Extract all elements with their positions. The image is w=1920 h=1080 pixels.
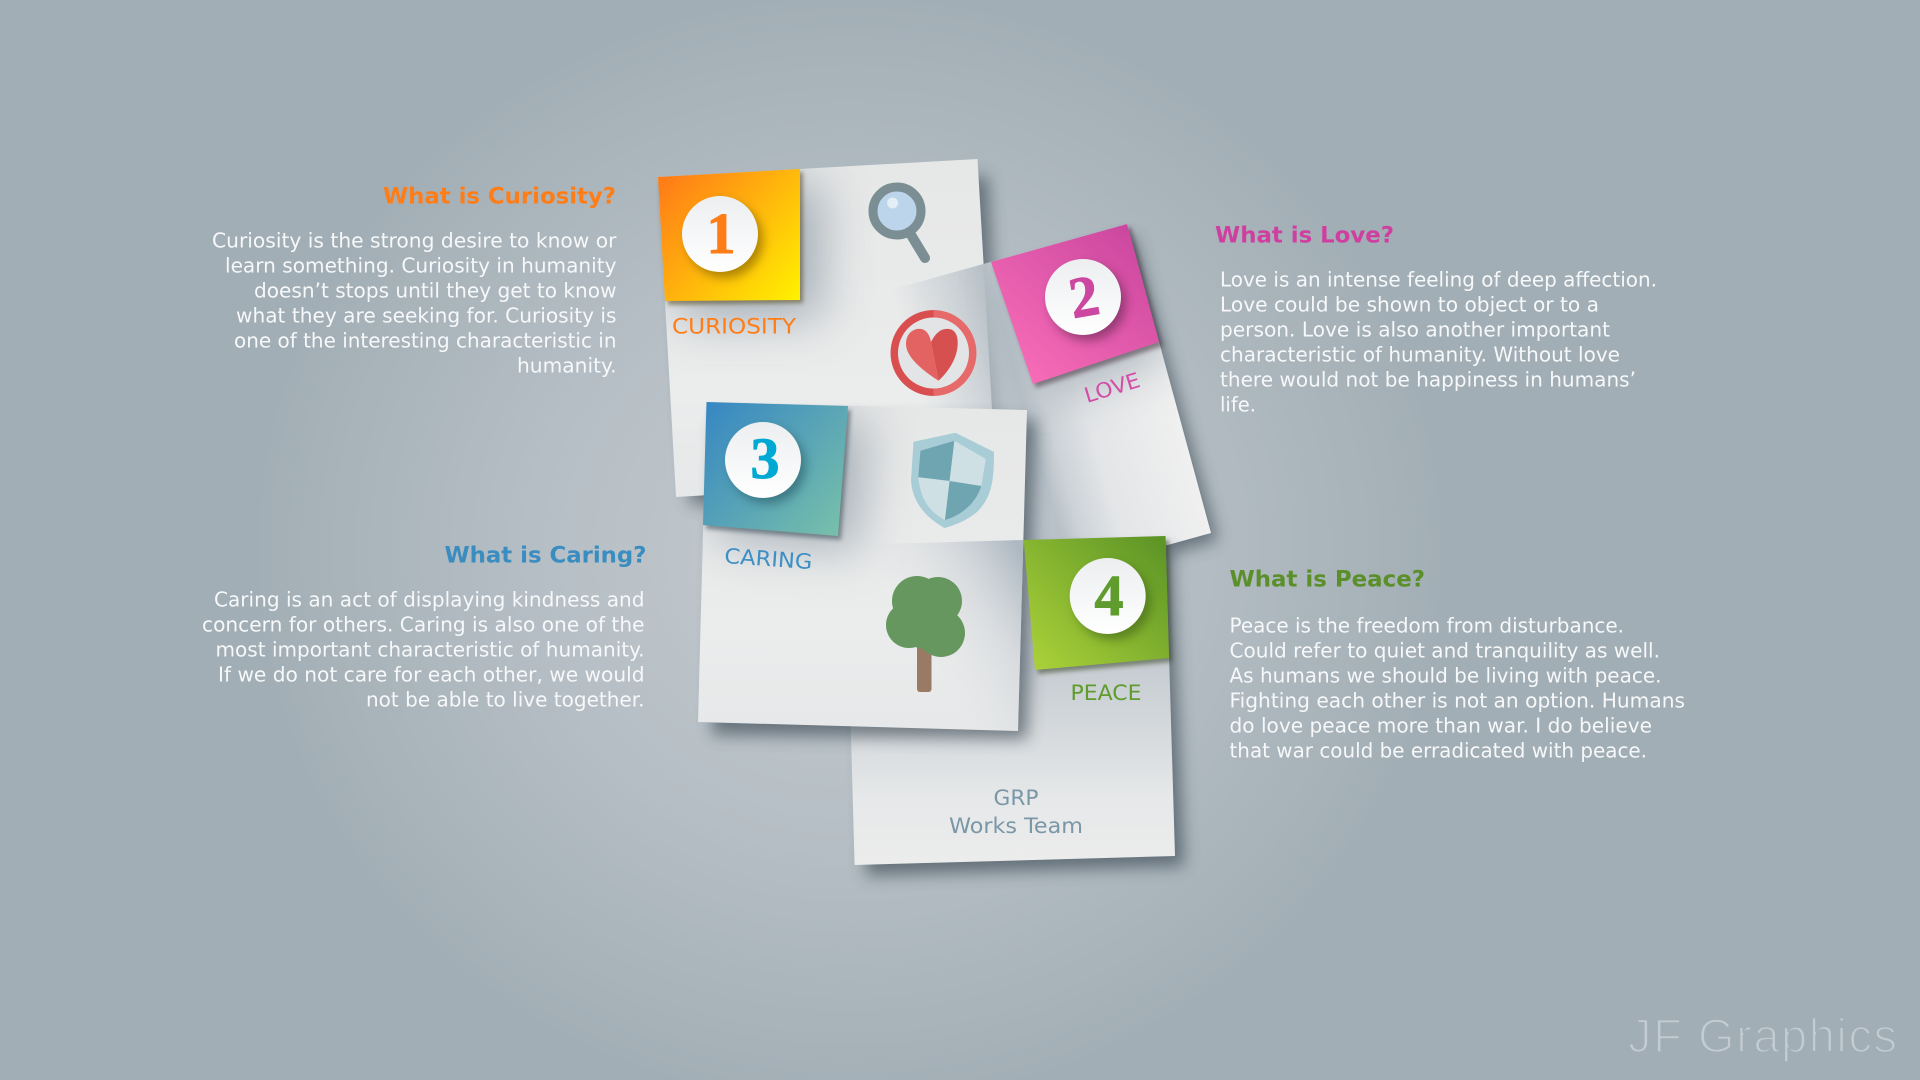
text block: curiosity: What is Curiosity? [383,184,616,209]
text block: love: What is Love? [1215,224,1394,248]
text block: love: life. [1220,392,1256,416]
text block: curiosity: humanity. [517,354,616,378]
text block: love: there would not be happiness in humans’ [1220,368,1636,392]
text block: caring: What is Caring? [444,544,646,568]
panel: card 1 curiosity [658,159,1004,505]
text block: curiosity: one of the interesting characteristic in [234,328,616,352]
badge 1 [658,169,803,305]
text block: love: Love could be shown to object or to a [1220,292,1599,316]
team credit: Works Team [949,814,1083,838]
infographic canvas [203,116,1894,1061]
team credit: GRP [994,786,1038,810]
text block: curiosity [212,184,617,378]
panel: card 2 love [911,224,1225,562]
panel: card 4 peace [846,536,1184,876]
text block: curiosity: Curiosity is the strong desire to know or [212,228,617,252]
badge 4 [1024,536,1172,674]
text block: caring [202,544,646,712]
text block: peace: As humans we should be living with peace. [1230,664,1662,688]
icon: heart badge [891,310,976,396]
badge 4: 4 [1094,563,1124,628]
text block: love: characteristic of humanity. Without love [1220,342,1620,366]
panel: card 3 caring [698,402,1046,750]
text block: curiosity: learn something. Curiosity in humanity [225,254,617,278]
badge 3 [703,402,851,540]
badge 2 [991,224,1163,388]
text block: peace: do love peace more than war. I do believe [1230,714,1652,738]
team credit [949,786,1083,838]
text block: caring: most important characteristic of humanity. [216,638,644,662]
text block: curiosity: what they are seeking for. Curiosity is [236,304,616,328]
badge 2: 2 [1064,262,1104,331]
label: caring: CARING [724,544,813,574]
text block: peace: What is Peace? [1230,568,1425,592]
icon: tree [886,576,965,692]
text block: caring: concern for others. Caring is also one of the [202,612,644,636]
text block: love [1215,224,1657,416]
icon: shield [911,433,994,528]
text block: peace: Could refer to quiet and tranquility as well. [1230,638,1660,662]
text block: love: person. Love is also another important [1220,318,1610,342]
label: love: LOVE [1081,368,1143,408]
text block: peace: Fighting each other is not an option. Humans [1230,688,1685,712]
badge 1: 1 [706,201,736,266]
badge 3: 3 [750,426,780,491]
text block: curiosity: doesn’t stops until they get to know [254,278,616,302]
text block: caring: If we do not care for each other, we would [218,662,644,686]
text block: peace: that war could be erradicated with peace. [1230,738,1647,762]
text block: peace [1230,568,1685,762]
text block: peace: Peace is the freedom from disturbance. [1230,614,1624,638]
watermark: JF Graphics [1628,1009,1897,1062]
label: peace: PEACE [1070,681,1142,705]
label: curiosity: CURIOSITY [672,314,796,338]
icon: magnifying glass [873,187,925,258]
text block: love: Love is an intense feeling of deep affection. [1220,268,1657,292]
text block: caring: Caring is an act of displaying kindness and [214,588,644,612]
text block: caring: not be able to live together. [366,688,644,712]
